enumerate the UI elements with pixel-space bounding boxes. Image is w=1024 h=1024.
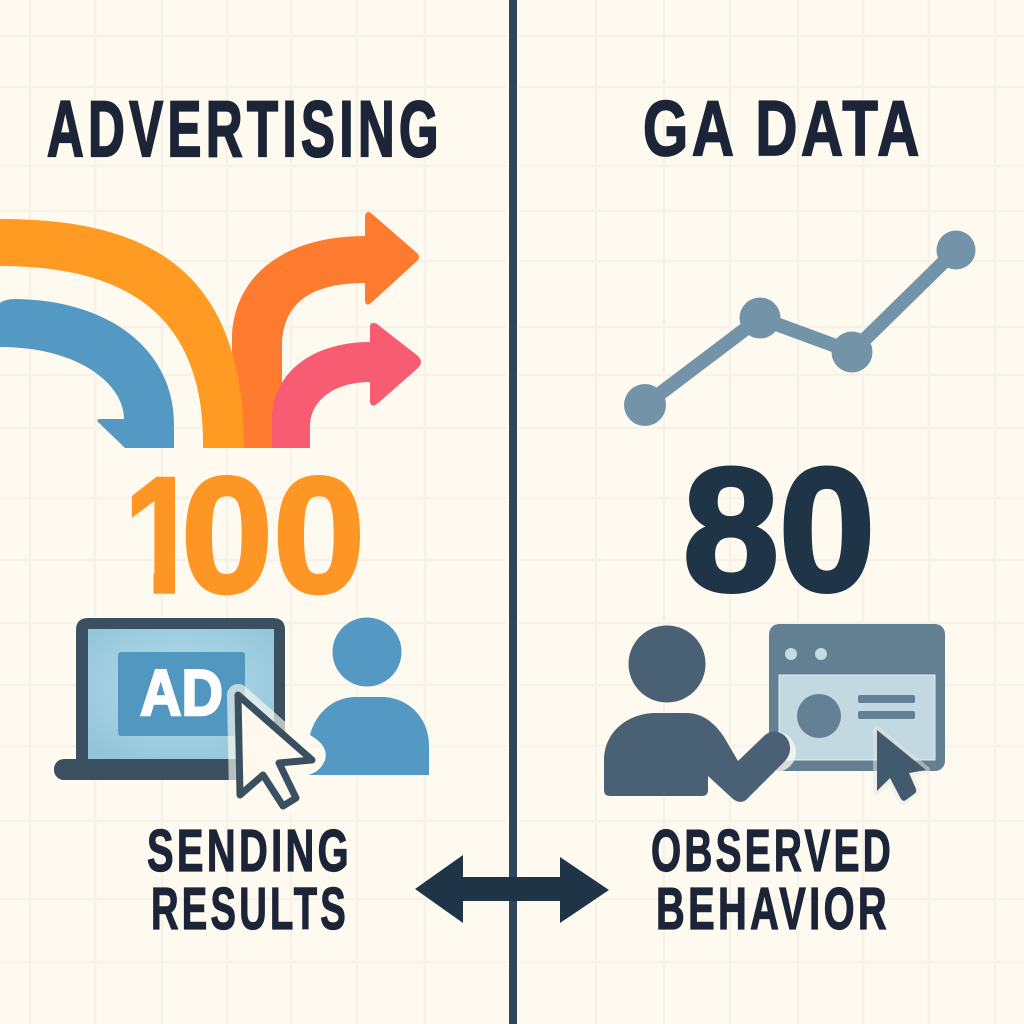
label: sending results: SENDING (147, 818, 352, 884)
icon: browser window (769, 624, 945, 771)
browser frame (769, 624, 945, 771)
laptop body (76, 618, 285, 759)
icon: blue user (308, 618, 429, 775)
icon: laptop with ad (54, 618, 285, 780)
arrow: orange incoming band (0, 219, 244, 448)
label: sending results (147, 818, 352, 942)
arrow: blue incoming (0, 299, 174, 448)
double arrow (415, 855, 609, 923)
browser dots (785, 648, 797, 660)
label: observed behavior (651, 818, 894, 942)
icon: ad cursor (238, 695, 312, 806)
value: 100 (132, 475, 360, 596)
arrow: red-orange up-right (232, 212, 419, 448)
laptop base (54, 759, 254, 780)
content image placeholder (797, 694, 841, 738)
icon: browser cursor (877, 730, 926, 801)
body and arm (604, 713, 790, 802)
heading: advertising: ADVERTISING (47, 84, 443, 173)
value: 80: 80 (683, 433, 875, 628)
laptop screen (88, 629, 274, 759)
browser content panel (779, 675, 935, 760)
label: sending results: RESULTS (151, 876, 349, 942)
arm halo (756, 732, 796, 772)
value: 100: 00 (181, 443, 365, 627)
icon: dark user pointing (604, 626, 796, 802)
label: observed behavior: OBSERVED (651, 818, 894, 884)
icon: traffic flow arrows (0, 212, 421, 448)
heading: GA data: GA DATA (643, 84, 923, 172)
arrow: pink up-right (272, 323, 421, 448)
value: 100: 1 (124, 443, 200, 627)
ad box (118, 652, 245, 736)
line chart (624, 230, 976, 426)
head (628, 626, 706, 702)
label: observed behavior: BEHAVIOR (656, 876, 890, 942)
center divider (509, 0, 517, 1024)
ad label: AD (140, 656, 223, 729)
content lines (858, 695, 915, 703)
